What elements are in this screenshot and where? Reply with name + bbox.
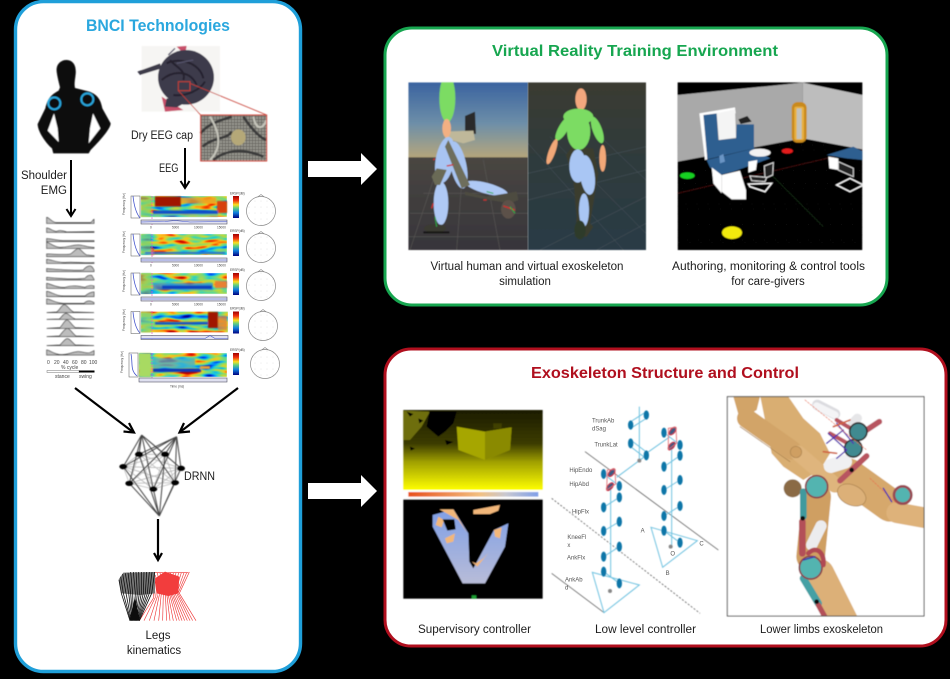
chart axis: percent gait cycle: 60 <box>72 360 78 366</box>
icon: human torso silhouette with shoulder electrodes <box>38 60 111 153</box>
image: depth map and traversable floor segmentation <box>403 410 543 599</box>
heading: Exoskeleton Structure and Control: Exoskeleton Structure and Control <box>531 365 799 382</box>
diagram: low level controller joint model <box>552 407 718 613</box>
diagram: deep recurrent neural network <box>119 435 185 516</box>
label: Shoulder EMG: EMG <box>41 185 67 197</box>
chart: EEG spectrogram 3: Frequency (Hz) <box>122 270 126 292</box>
chart: EEG spectrogram 5: Frequency (Hz) <box>120 351 124 373</box>
chart: EEG spectrogram 3: 10000 <box>194 302 203 306</box>
panel: BNCI Technologies <box>16 2 300 672</box>
chart axis: percent gait cycle <box>47 360 98 380</box>
arrow: BNCI to exoskeleton <box>308 475 377 507</box>
labels: joint names: B <box>666 571 670 577</box>
labels: joint names: O <box>670 552 675 558</box>
label: Shoulder EMG <box>21 170 67 197</box>
chart: EEG spectrogram 5: Time (ms) <box>170 384 184 388</box>
labels: joint names: AnkAb <box>565 577 583 583</box>
chart axis: percent gait cycle: stance <box>55 374 70 380</box>
labels: joint names: HipAbd <box>569 482 589 488</box>
chart: EEG spectrogram 1: 15000 <box>217 226 226 230</box>
labels: joint names <box>565 418 704 591</box>
caption: virtual human and exoskeleton <box>430 261 624 288</box>
heading: Virtual Reality Training Environment: Virtual Reality Training Environment <box>492 43 779 60</box>
chart: EEG spectrogram 3: ERSP(dB) <box>230 268 245 272</box>
caption: Lower limbs exoskeleton: Lower limbs exoskeleton <box>760 624 883 636</box>
chart: legs kinematics stick figures <box>119 572 196 621</box>
chart: EEG spectrogram 3: 5000 <box>172 302 179 306</box>
chart: EEG spectrogram 4 <box>122 306 278 340</box>
heading: BNCI Technologies: BNCI Technologies <box>86 16 230 35</box>
chart: EEG spectrogram 4: ERSP(dB) <box>230 306 245 310</box>
chart: EEG spectrogram 3: 15000 <box>217 302 226 306</box>
labels: joint names: KneeFl <box>567 535 586 541</box>
arrow: shoulder to EMG <box>66 160 76 216</box>
image: virtual human side view <box>408 74 528 250</box>
chart: EEG spectrogram 2: Frequency (Hz) <box>122 231 126 253</box>
chart: EEG spectrogram 5: ERSP(dB) <box>230 348 245 352</box>
arrow: EEG to network <box>180 388 238 432</box>
chart axis: percent gait cycle: swing <box>79 374 92 380</box>
chart: EEG spectrogram 2: ERSP(dB) <box>230 229 245 233</box>
caption: Supervisory controller: Supervisory controller <box>418 624 531 636</box>
photo: dry EEG cap with magnified inset <box>137 46 267 161</box>
chart: EMG activation profiles over gait cycle <box>47 217 94 355</box>
chart: EEG spectrogram 2: 15000 <box>217 264 226 268</box>
chart: EEG spectrogram 2: 0 <box>150 264 152 268</box>
chart: EEG spectrogram 3 <box>122 268 276 306</box>
labels: joint names: HipEndo <box>569 468 593 474</box>
caption: authoring tools: Authoring, monitoring & control tools <box>672 261 865 273</box>
caption: authoring tools <box>672 261 865 288</box>
caption: authoring tools: for care-givers <box>731 276 805 288</box>
caption: virtual human and exoskeleton: simulation <box>499 276 551 288</box>
image: virtual human front view <box>528 82 646 250</box>
chart: EEG spectrogram 1: ERSP(dB) <box>230 192 245 196</box>
arrow: BNCI to virtual reality <box>308 153 377 185</box>
chart: EEG spectrogram 2: 5000 <box>172 264 179 268</box>
chart axis: percent gait cycle: 40 <box>63 360 69 366</box>
arrow: network to kinematics <box>154 519 162 560</box>
labels: joint names: HipFlx <box>572 509 589 515</box>
label: Dry EEG cap: Dry EEG cap <box>131 130 193 142</box>
labels: joint names: dSag <box>592 427 606 433</box>
arrow: cap to EEG <box>180 148 190 188</box>
chart axis: percent gait cycle: 20 <box>54 360 60 366</box>
labels: joint names: AnkFlx <box>567 556 585 562</box>
chart: EEG spectrogram 1: 10000 <box>194 226 203 230</box>
chart: EEG spectrogram 1: Frequency (Hz) <box>122 193 126 215</box>
chart: EEG spectrogram 4: Frequency (Hz) <box>122 309 126 331</box>
labels: joint names: x <box>567 543 570 549</box>
panel: Exoskeleton Structure and Control <box>385 349 946 646</box>
chart axis: percent gait cycle: 100 <box>89 360 98 366</box>
chart axis: percent gait cycle: 0 <box>47 360 50 366</box>
chart: EEG spectrogram 1: 0 <box>150 226 152 230</box>
chart: EEG spectrogram 2: 10000 <box>194 264 203 268</box>
label: Legs kinematics: kinematics <box>127 645 181 657</box>
labels: joint names: A <box>641 529 645 535</box>
chart: EEG spectrogram 3: 0 <box>150 302 152 306</box>
image: 3D room authoring scene <box>678 82 863 250</box>
labels: joint names: d <box>565 585 568 591</box>
label: DRNN: DRNN <box>184 471 215 483</box>
chart axis: percent gait cycle: % cycle <box>61 365 78 371</box>
labels: joint names: TrunkLat <box>594 443 618 449</box>
label: Legs kinematics: Legs <box>146 630 171 642</box>
image: lower limbs exoskeleton on wooden mannequin <box>727 395 933 623</box>
chart: EEG spectrogram 1: 5000 <box>172 226 179 230</box>
chart: EEG spectrogram 2 <box>122 229 276 268</box>
labels: joint names: C <box>699 542 704 548</box>
arrow: EMG to network <box>75 388 134 432</box>
caption: Low level controller: Low level controller <box>595 624 696 636</box>
chart: EEG spectrogram 1 <box>122 192 276 230</box>
caption: virtual human and exoskeleton: Virtual human and virtual exoskeleton <box>430 261 624 273</box>
label: Legs kinematics <box>127 630 181 657</box>
labels: joint names: TrunkAb <box>592 418 615 424</box>
panel: Virtual Reality Training Environment <box>385 28 887 305</box>
label: EEG: EEG <box>159 163 179 175</box>
chart axis: percent gait cycle: 80 <box>81 360 87 366</box>
chart: EEG spectrogram 5 <box>120 348 280 388</box>
label: Shoulder EMG: Shoulder <box>21 170 67 182</box>
